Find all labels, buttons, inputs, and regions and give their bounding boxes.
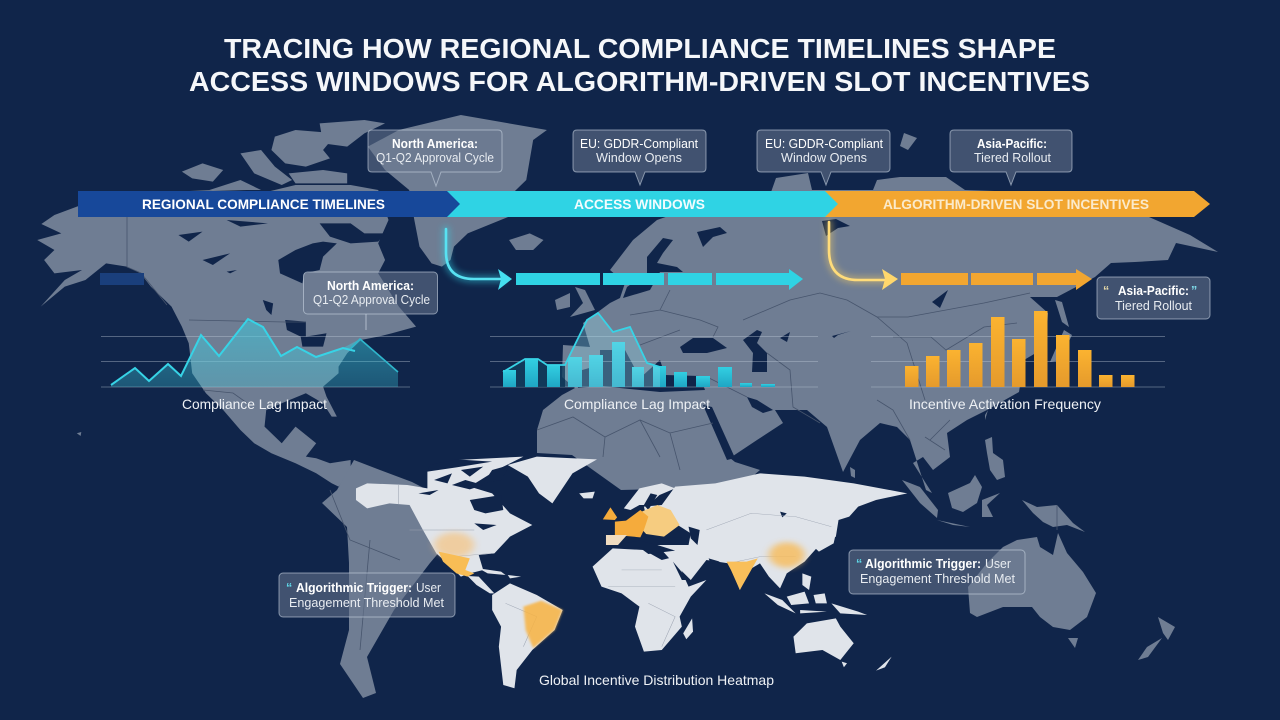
callout: North America mid: Q1-Q2 Approval Cycle — [313, 293, 430, 307]
large world map backdrop — [37, 115, 1218, 698]
heatmap: Brazil glow — [523, 601, 563, 648]
heatmap: Iberia — [606, 535, 627, 545]
callout: North America mid: North America: — [327, 279, 414, 293]
heatmap: Caribbean — [479, 568, 521, 578]
callout: algorithmic trigger right — [849, 550, 1025, 594]
callout: algorithmic trigger left: User — [416, 581, 441, 595]
callout: Asia-Pacific top — [950, 130, 1072, 185]
arrow: blue flow segment — [100, 273, 144, 285]
map: Greenland — [368, 115, 547, 267]
heatmap: China glow — [769, 542, 805, 568]
map: New Zealand — [1138, 617, 1175, 660]
title: ACCESS WINDOWS FOR ALGORITHM-DRIVEN SLOT INCENTIVES — [189, 66, 1090, 97]
chart: compliance lag bar and area chart — [490, 313, 818, 387]
callout: EU second: Window Opens — [781, 151, 867, 165]
chart label: compliance lag middle: Compliance Lag Impact — [564, 396, 710, 412]
heatmap: New Zealand — [842, 657, 892, 671]
arrow: teal dashed flow — [516, 269, 803, 290]
map: British Isles — [555, 287, 595, 317]
callout: Asia-Pacific mid: “ — [1103, 284, 1109, 298]
heatmap: Western Europe strong — [603, 507, 648, 537]
seas cut into the backdrop — [178, 219, 948, 460]
map: Sakhalin and Japan — [1050, 300, 1072, 362]
heatmap: Mexico — [439, 552, 474, 577]
callout: EU first: EU: GDDR-Compliant — [580, 137, 699, 151]
arrow: yellow curved connector — [829, 222, 898, 290]
banner arrow: regional compliance timelines — [78, 191, 460, 217]
heatmap: India — [726, 558, 758, 590]
map: Australia — [968, 533, 1096, 648]
callout: Asia-Pacific mid: Asia-Pacific: — [1118, 284, 1189, 298]
heatmap caption: Global Incentive Distribution Heatmap — [539, 672, 774, 688]
map: Eurasia and Africa — [537, 173, 1218, 493]
heatmap: inner seas — [608, 493, 787, 580]
callout: North America mid — [304, 272, 438, 330]
map: Iceland — [509, 233, 543, 250]
callout: algorithmic trigger left: “ — [286, 581, 292, 595]
callout: Asia-Pacific mid: Tiered Rollout — [1115, 299, 1193, 313]
map: South America — [322, 460, 447, 698]
callout: algorithmic trigger left — [279, 573, 455, 617]
heatmap: Africa — [593, 548, 706, 652]
callout: algorithmic trigger right: Engagement Threshold Met — [860, 572, 1016, 586]
chart label: compliance lag left: Compliance Lag Impact — [182, 396, 327, 412]
callout: EU first: Window Opens — [596, 151, 682, 165]
heatmap: Japan — [814, 533, 836, 552]
heatmap: Eastern Europe highlight — [639, 505, 680, 537]
chart label: incentive activation: Incentive Activation Frequency — [909, 396, 1101, 412]
arrow: teal curved connector — [446, 229, 512, 290]
callout: algorithmic trigger right: User — [985, 557, 1011, 571]
callout: North America top: Q1-Q2 Approval Cycle — [376, 151, 494, 165]
heatmap: Eurasia — [644, 473, 907, 590]
callout: Asia-Pacific top: Asia-Pacific: — [977, 137, 1047, 151]
backdrop borders — [127, 217, 1057, 650]
banner arrow: algorithm-driven slot incentives — [825, 191, 1210, 217]
banner arrow: algorithm-driven slot incentives: ALGORITHM-DRIVEN SLOT INCENTIVES — [883, 196, 1149, 212]
panel: top callouts — [368, 130, 1072, 186]
arrow: orange dashed flow — [901, 269, 1092, 290]
callout: EU first — [573, 130, 706, 185]
heatmap: Hudson Bay and arctic channels — [418, 459, 510, 530]
title: TRACING HOW REGIONAL COMPLIANCE TIMELINES SHAPE — [224, 33, 1056, 64]
heatmap: North America — [356, 457, 532, 577]
map: Novaya Zemlya — [900, 133, 917, 150]
chart: compliance lag area chart — [101, 319, 410, 387]
callout: Asia-Pacific mid — [1097, 277, 1210, 319]
mini world heatmap — [356, 457, 907, 688]
banner arrow: access windows — [446, 191, 838, 217]
heatmap: USA glow — [434, 532, 474, 558]
heatmap: Greenland — [508, 457, 597, 503]
heatmap: Iceland — [579, 492, 595, 498]
chart: incentive activation bars — [871, 311, 1165, 387]
heatmap: South America — [492, 583, 563, 688]
map: North America and arctic — [37, 115, 547, 487]
callout: algorithmic trigger left: Algorithmic Trigger: — [296, 581, 412, 595]
callout: algorithmic trigger right: “ — [856, 557, 862, 571]
heatmap: Australia — [793, 618, 854, 660]
callout: Asia-Pacific mid: ” — [1191, 284, 1197, 298]
callout: North America top: North America: — [392, 137, 478, 151]
banner arrow: regional compliance timelines: REGIONAL COMPLIANCE TIMELINES — [142, 196, 385, 212]
callout: algorithmic trigger left: Engagement Threshold Met — [289, 596, 445, 610]
heatmap: borders — [398, 485, 831, 647]
callout: EU second — [757, 130, 890, 185]
callout: algorithmic trigger right: Algorithmic Trigger: — [865, 557, 981, 571]
callout: EU second: EU: GDDR-Compliant — [765, 137, 884, 151]
callout: North America top — [368, 130, 502, 186]
heatmap: Southeast Asia islands — [764, 573, 867, 615]
callout: Asia-Pacific top: Tiered Rollout — [974, 151, 1052, 165]
heatmap: Madagascar — [683, 618, 693, 639]
map: Southeast Asia islands — [850, 410, 1085, 532]
heatmap: Central America — [468, 576, 494, 593]
banner arrow: access windows: ACCESS WINDOWS — [574, 196, 705, 212]
title — [189, 33, 1090, 97]
map: Hawaii — [77, 432, 81, 436]
heatmap: Scandinavia — [624, 483, 675, 510]
